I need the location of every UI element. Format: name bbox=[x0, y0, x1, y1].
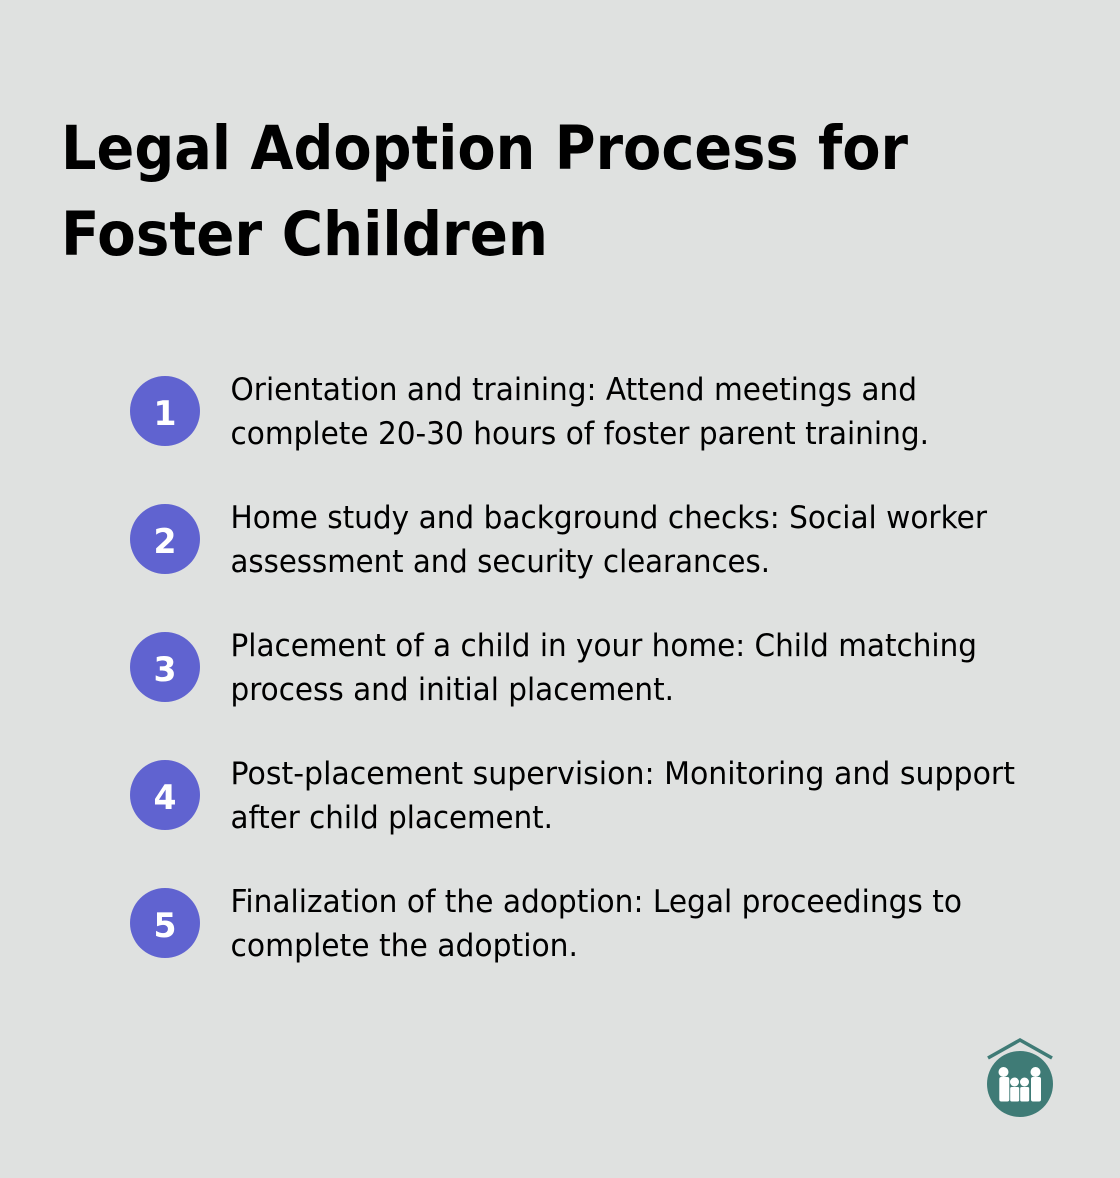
step 5 bbox=[130, 884, 962, 964]
step 1 bbox=[130, 372, 929, 452]
step 2 text: assessment and security clearances. bbox=[230, 544, 770, 580]
step 5 text bbox=[230, 884, 962, 964]
step 1 text: complete 20-30 hours of foster parent training. bbox=[230, 416, 929, 452]
number badge 5: 5 bbox=[154, 906, 176, 946]
step 4 text: Post-placement supervision: Monitoring and support bbox=[230, 756, 1015, 792]
step 4 bbox=[130, 756, 1015, 836]
title: Foster Children bbox=[61, 199, 548, 270]
number badge 2: 2 bbox=[154, 522, 176, 562]
number badge 3: 3 bbox=[154, 650, 176, 690]
step 2 text: Home study and background checks: Social worker bbox=[230, 500, 987, 536]
step 1 text bbox=[230, 372, 929, 452]
number badge 3 bbox=[130, 632, 200, 702]
step 1 text: Orientation and training: Attend meetings and bbox=[230, 372, 917, 408]
step 4 text bbox=[230, 756, 1015, 836]
number badge 2 bbox=[130, 504, 200, 574]
title bbox=[61, 113, 908, 270]
number badge 1: 1 bbox=[154, 394, 176, 434]
step 5 text: Finalization of the adoption: Legal proceedings to bbox=[230, 884, 962, 920]
number badge 5 bbox=[130, 888, 200, 958]
icon: family in house logo bbox=[987, 1040, 1053, 1117]
step 2 text bbox=[230, 500, 987, 580]
number badge 4 bbox=[130, 760, 200, 830]
number badge 4: 4 bbox=[154, 778, 176, 818]
title: Legal Adoption Process for bbox=[61, 113, 908, 184]
step 3 bbox=[130, 628, 977, 708]
step 3 text bbox=[230, 628, 977, 708]
step 2 bbox=[130, 500, 987, 580]
step 3 text: Placement of a child in your home: Child matching bbox=[230, 628, 977, 664]
step 4 text: after child placement. bbox=[230, 800, 553, 836]
step 5 text: complete the adoption. bbox=[230, 928, 578, 964]
number badge 1 bbox=[130, 376, 200, 446]
step 3 text: process and initial placement. bbox=[230, 672, 674, 708]
